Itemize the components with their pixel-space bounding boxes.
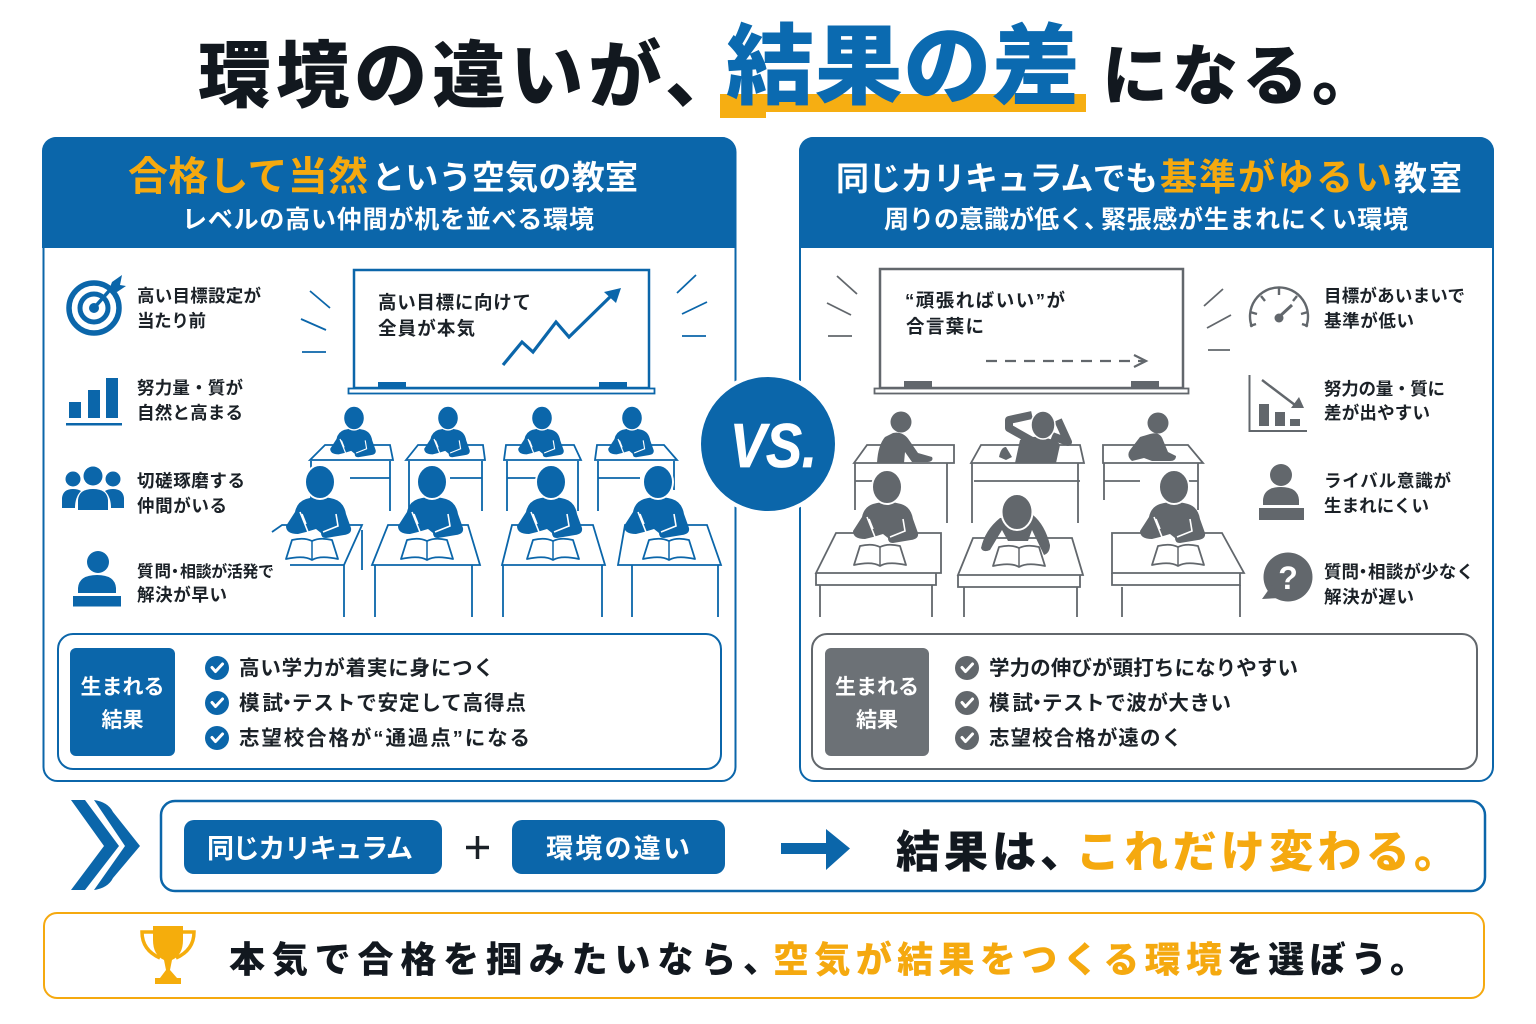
- pill: curriculum: [184, 820, 442, 874]
- text: right item 3: ライバル意識が: [1324, 471, 1452, 491]
- checklist right: 学力の伸びが頭打ちになりやすい: [989, 656, 1298, 680]
- right header: [799, 137, 1494, 248]
- arrow: [781, 829, 850, 870]
- students gray: [816, 411, 1244, 617]
- spark lines right: [827, 276, 1231, 350]
- CTA text: を選ぼう。: [1227, 939, 1426, 980]
- VS badge: VS.: [730, 412, 817, 481]
- text: item 4: ・: [167, 564, 183, 581]
- pill: curriculum: 同じカリキュラム: [207, 834, 413, 864]
- checklist left: 志望校合格が“通過点”になる: [239, 726, 530, 750]
- text: right item 1: 目標があいまいで: [1324, 286, 1465, 306]
- right header: 基準がゆるい: [1160, 157, 1392, 198]
- CTA text: 本気で合格を掴みたいなら、: [229, 939, 779, 980]
- text: right item 3: 生まれにくい: [1324, 496, 1429, 516]
- result box right: 結果: [856, 709, 898, 732]
- title: [198, 17, 1378, 118]
- text: item 2: 自然と高まる: [137, 403, 243, 423]
- checklist right: 志望校合格が遠のく: [989, 726, 1182, 750]
- left header: 合格して当然: [128, 155, 368, 199]
- dashed arrow: [986, 355, 1146, 367]
- icon: bars: [66, 378, 122, 426]
- students blue: [272, 406, 721, 617]
- checklist left: 高い学力が着実に身につく: [239, 656, 494, 680]
- text: right item 1: [1324, 286, 1465, 331]
- text: item 1: 高い目標設定が: [137, 286, 262, 306]
- icon: gray person: [1259, 464, 1304, 520]
- left header: [42, 137, 736, 248]
- text: right item 2: 努力の量・質に: [1324, 379, 1445, 399]
- result box left: [58, 634, 721, 769]
- icon: gauge: [1250, 287, 1308, 327]
- text: right item 3: [1324, 471, 1452, 516]
- checklist left: [205, 656, 530, 750]
- text: right item 4: 相談が少なく: [1368, 562, 1474, 582]
- icon: question bubble: [1262, 552, 1312, 602]
- panel: left classroom: [42, 137, 736, 781]
- plus: [466, 836, 489, 859]
- checklist right: ・: [1027, 692, 1047, 715]
- whiteboard right: [874, 269, 1188, 394]
- checklist right: [955, 656, 1298, 750]
- whiteboard right: 合言葉に: [906, 316, 984, 337]
- CTA text: 空気が結果をつくる環境: [773, 939, 1222, 980]
- conclusion text: 結果は、: [896, 828, 1084, 877]
- result box right: [812, 634, 1477, 769]
- text: item 2: [137, 378, 244, 423]
- pill: environment: 環境の違い: [546, 834, 690, 864]
- call to action: [44, 913, 1484, 998]
- pill: environment: [512, 820, 725, 874]
- icon: target: [69, 275, 126, 333]
- icon: group: [62, 466, 124, 510]
- text: item 2: 努力量・質が: [137, 378, 244, 398]
- text: item 4: 解決が早い: [137, 585, 227, 605]
- text: item 1: 当たり前: [137, 311, 206, 331]
- checklist left: ・: [277, 692, 297, 715]
- text: item 3: [137, 471, 245, 516]
- result box left: 結果: [102, 709, 144, 732]
- text: right item 1: 基準が低い: [1324, 311, 1414, 331]
- icon: trophy: [142, 926, 194, 984]
- VS badge: [697, 373, 839, 515]
- right header: 緊張感が生まれにくい環境: [1101, 205, 1408, 234]
- icon: falling chart: [1250, 375, 1307, 431]
- text: right item 2: 差が出やすい: [1324, 403, 1430, 423]
- right header: 教室: [1394, 160, 1462, 197]
- result box left: 生まれる: [80, 676, 164, 699]
- text: item 4: 相談が活発で: [180, 562, 274, 581]
- equation bar: [161, 801, 1485, 891]
- text: right item 2: [1324, 379, 1445, 423]
- text: item 4: 質問: [137, 562, 171, 581]
- text: item 3: 切磋琢磨する: [137, 471, 245, 491]
- right header: 同じカリキュラムでも: [836, 160, 1158, 197]
- checklist left: テストで安定して高得点: [292, 692, 526, 715]
- whiteboard left: [348, 270, 654, 394]
- title: になる。: [1102, 39, 1378, 113]
- right header: 周りの意識が低く: [884, 205, 1084, 234]
- conclusion text: これだけ変わる。: [1076, 828, 1458, 877]
- left header: という空気の教室: [372, 159, 638, 196]
- spark lines left: [301, 275, 707, 352]
- text: right item 4: 質問: [1324, 562, 1359, 582]
- checklist right: テストで波が大きい: [1042, 691, 1231, 715]
- whiteboard right: “頑張ればいい”が: [905, 290, 1065, 311]
- text: right item 4: 解決が遅い: [1324, 587, 1414, 607]
- icon: chevrons: [71, 800, 140, 890]
- left header: レベルの高い仲間が机を並べる環境: [182, 205, 594, 234]
- whiteboard left: 高い目標に向けて: [378, 292, 531, 313]
- text: right item 4: [1324, 562, 1474, 607]
- title: 環境の違いが、: [198, 36, 738, 117]
- whiteboard left: 全員が本気: [378, 318, 475, 339]
- text: right item 4: ・: [1354, 562, 1372, 582]
- title: 結果の差: [726, 17, 1080, 116]
- checklist left: 模試: [239, 692, 284, 715]
- CTA text: [229, 939, 1426, 980]
- icon: question bubble: ?: [1278, 560, 1298, 596]
- conclusion text: [896, 828, 1458, 877]
- panel: right classroom: [799, 137, 1494, 781]
- result box right: 生まれる: [835, 676, 919, 699]
- chart arrow: [503, 288, 621, 365]
- icon: person at desk: [73, 551, 121, 606]
- right header: 、: [1084, 206, 1109, 234]
- text: item 1: [137, 286, 262, 331]
- checklist right: 模試: [989, 692, 1034, 715]
- text: item 3: 仲間がいる: [137, 496, 227, 516]
- text: item 4: [137, 562, 274, 605]
